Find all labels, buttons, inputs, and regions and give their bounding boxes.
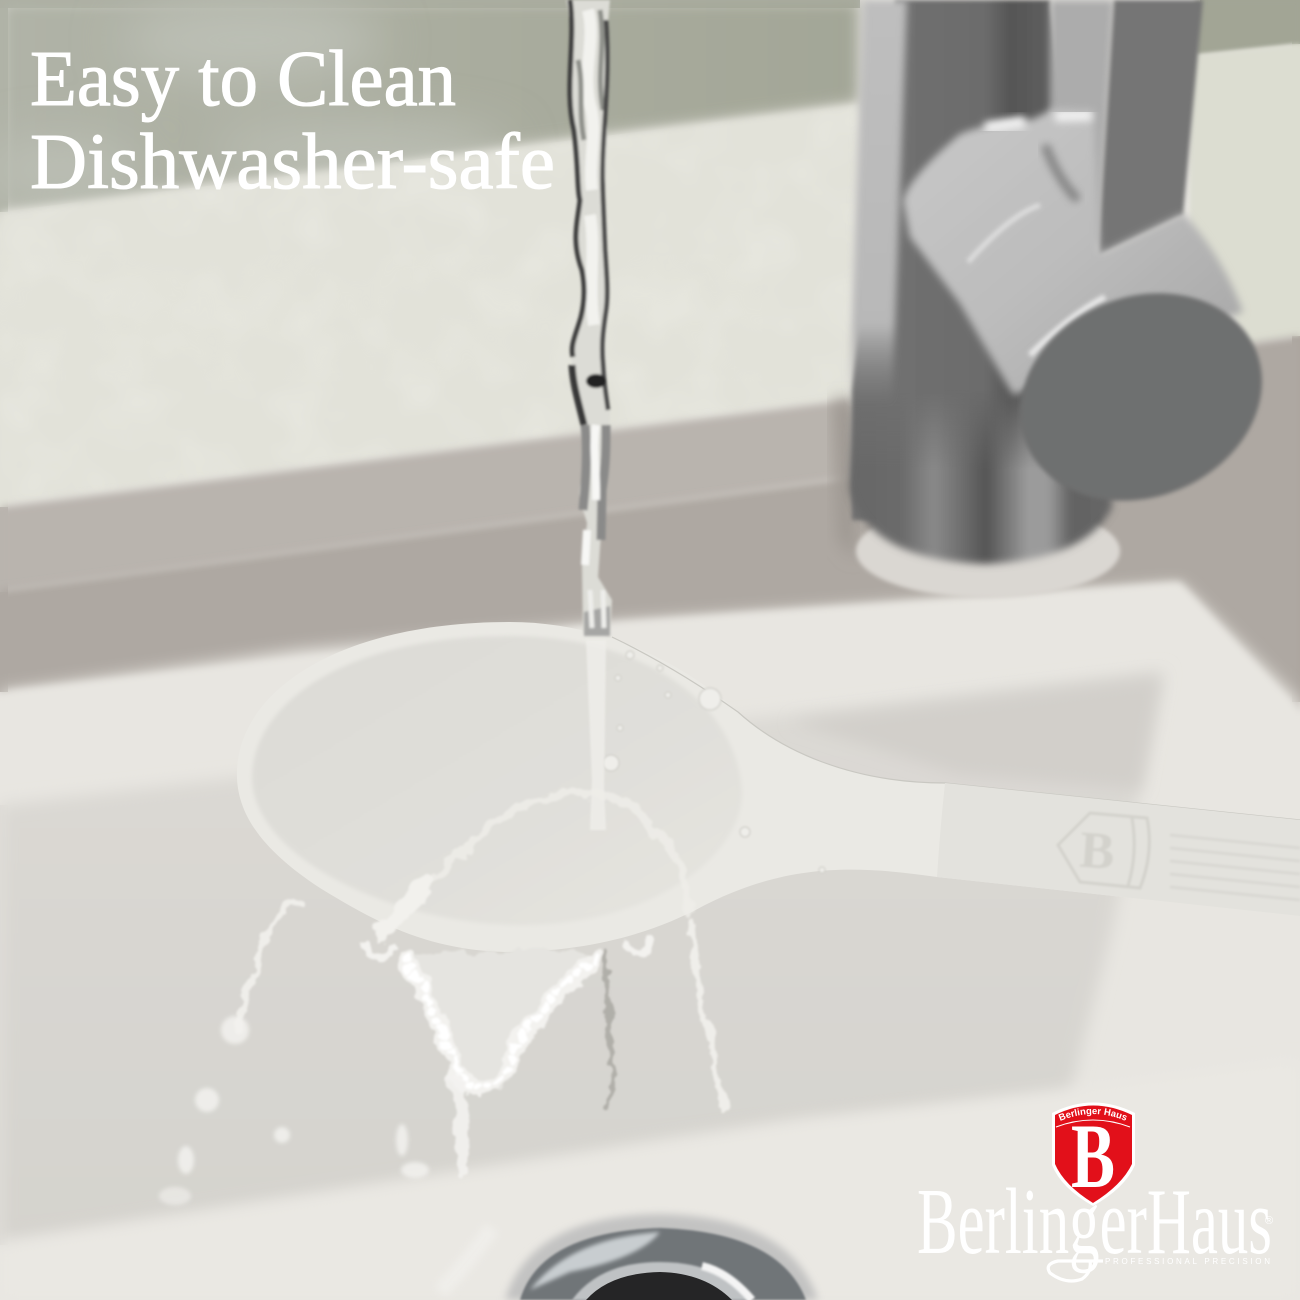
centre sheet fill	[410, 952, 595, 1090]
faucet base shadow	[832, 400, 855, 560]
faucet inner light column	[1050, 0, 1114, 250]
small drip under spoon	[625, 940, 650, 951]
faucet	[832, 0, 1293, 598]
right drip	[692, 920, 725, 1110]
spoon bowl	[252, 636, 742, 925]
drain	[440, 1214, 818, 1300]
background: kitchen wall and counter	[0, 0, 1300, 709]
wall: pale marble tile	[0, 104, 860, 505]
handle crease	[968, 205, 1040, 262]
stream lower white core	[585, 425, 596, 565]
splash ring on bowl	[385, 792, 692, 932]
sink basin	[0, 670, 1165, 1242]
wall: marble mottling	[0, 100, 860, 510]
basin shadow upper right	[790, 677, 1160, 790]
tagline: PROFESSIONAL PRECISION	[1105, 1257, 1270, 1266]
stream left dark edge	[570, 0, 584, 357]
title line 2: Dishwasher-safe	[30, 119, 555, 206]
stream foot light	[590, 590, 604, 628]
embossed shield logo on handle	[1058, 813, 1149, 888]
water column on spoon	[586, 640, 606, 830]
centre sheet froth	[405, 955, 595, 1089]
brand logo	[917, 1102, 1273, 1282]
falling water stream	[385, 0, 692, 932]
mid drip	[606, 950, 611, 1108]
handle edge reflection	[1030, 297, 1105, 355]
faucet lower body	[850, 380, 1112, 564]
splash near drain	[440, 1228, 492, 1292]
handle ridges	[1170, 835, 1300, 900]
wall: upper tile band	[0, 0, 860, 212]
handle cap	[989, 258, 1293, 536]
centre stream	[455, 1080, 462, 1172]
sink	[0, 584, 1300, 1300]
wall: right side band	[1195, 0, 1300, 56]
sink rim	[0, 584, 1300, 1300]
stream top wobbling highlights	[587, 10, 594, 325]
spoon silhouette	[237, 622, 1300, 952]
shield emblem: B	[1071, 1105, 1115, 1207]
stream translucent fill	[566, 0, 612, 637]
counter: top surface	[0, 336, 1300, 712]
registered mark: ®	[1265, 1215, 1273, 1227]
handle shine	[985, 115, 1092, 128]
wall: right side pale tile	[1190, 44, 1300, 344]
wordmark swash	[1048, 1261, 1103, 1281]
spoon handle sleeve	[937, 783, 1300, 916]
water splashes below spoon	[236, 905, 725, 1172]
falling droplets	[159, 1016, 429, 1205]
stream dark knot	[586, 374, 606, 388]
faucet base ring	[856, 504, 1120, 598]
faucet handle cylinder	[903, 109, 1243, 395]
faucet left highlight strip	[849, 0, 907, 405]
stream top inner shadows	[578, 10, 603, 140]
title	[30, 36, 555, 206]
left drip	[236, 905, 305, 1030]
faucet upper body	[852, 0, 1100, 520]
water drops on spoon	[603, 651, 825, 873]
stream soft body	[566, 0, 612, 637]
shield emblem: Berlinger Haus	[1058, 1108, 1127, 1121]
stream grey lower strips	[583, 425, 606, 540]
title line 1: Easy to Clean	[30, 36, 456, 123]
stream left dark lower edge	[572, 365, 584, 425]
counter: back ledge	[0, 400, 850, 592]
embossed shield logo on handle: B	[1078, 822, 1117, 881]
faucet spout neck	[1098, 0, 1203, 256]
sink front rim	[0, 1060, 1300, 1300]
centre sheet edge	[405, 955, 595, 1089]
spoon upper edge line	[612, 637, 1300, 820]
handle detail shadow	[1045, 145, 1078, 200]
wall: band light patches	[0, 0, 510, 200]
stream right dark edge	[602, 20, 608, 410]
stream foot	[584, 606, 610, 636]
spoon	[237, 622, 1300, 952]
small drip under rim	[362, 945, 390, 956]
